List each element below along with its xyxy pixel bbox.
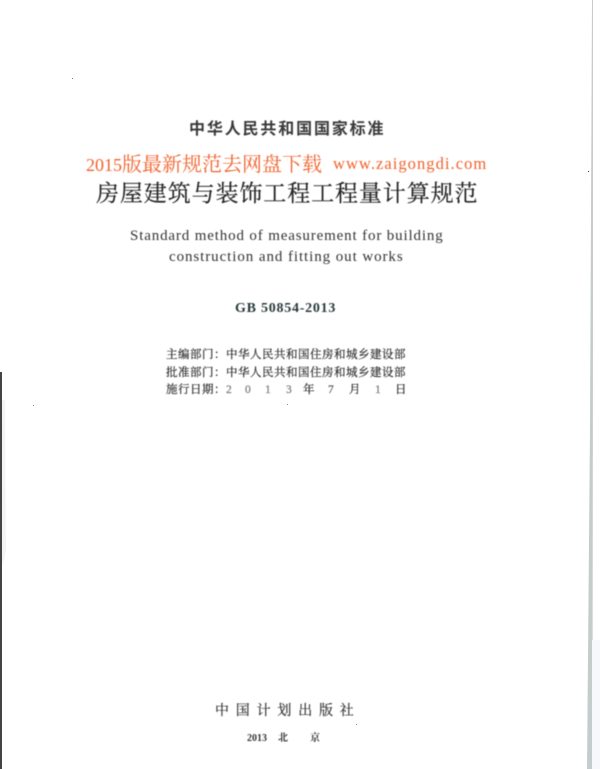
- issuing information: 施行日期：: [166, 384, 226, 396]
- publication year and city: 北: [278, 733, 288, 744]
- issuing information: 1: [375, 384, 381, 396]
- issuing information: 中华人民共和国住房和城乡建设部: [226, 367, 406, 379]
- issuing information: 3: [286, 384, 292, 396]
- publication year and city: [246, 732, 320, 744]
- issuing information: [166, 348, 407, 396]
- issuing information: 0: [245, 384, 251, 396]
- issuing information: 主编部门：: [166, 349, 226, 361]
- text: www.zaigongdi.com: [333, 154, 487, 173]
- English title: construction and fitting out works: [169, 249, 404, 265]
- issuing information: 年: [303, 384, 315, 396]
- issuing information: 日: [395, 384, 407, 396]
- standard number: GB 50854-2013: [235, 301, 336, 316]
- English title: Standard method of measurement for building: [130, 228, 444, 244]
- red download banner: 2015版最新规范去网盘下载: [86, 154, 322, 176]
- publisher: 中国计划出版社: [215, 704, 361, 719]
- English title: [130, 228, 444, 265]
- heading: national standard: 中华人民共和国国家标准: [189, 121, 385, 138]
- issuing information: 月: [349, 384, 361, 396]
- red download banner: [86, 153, 487, 176]
- issuing information: 中华人民共和国住房和城乡建设部: [226, 349, 406, 361]
- issuing information: 批准部门：: [166, 367, 226, 379]
- publication year and city: 京: [310, 733, 320, 744]
- publication year and city: 2013: [247, 733, 267, 744]
- issuing information: 7: [328, 384, 334, 396]
- title: 房屋建筑与装饰工程工程量计算规范: [96, 181, 478, 206]
- issuing information: 2: [226, 384, 232, 396]
- issuing information: 1: [265, 384, 271, 396]
